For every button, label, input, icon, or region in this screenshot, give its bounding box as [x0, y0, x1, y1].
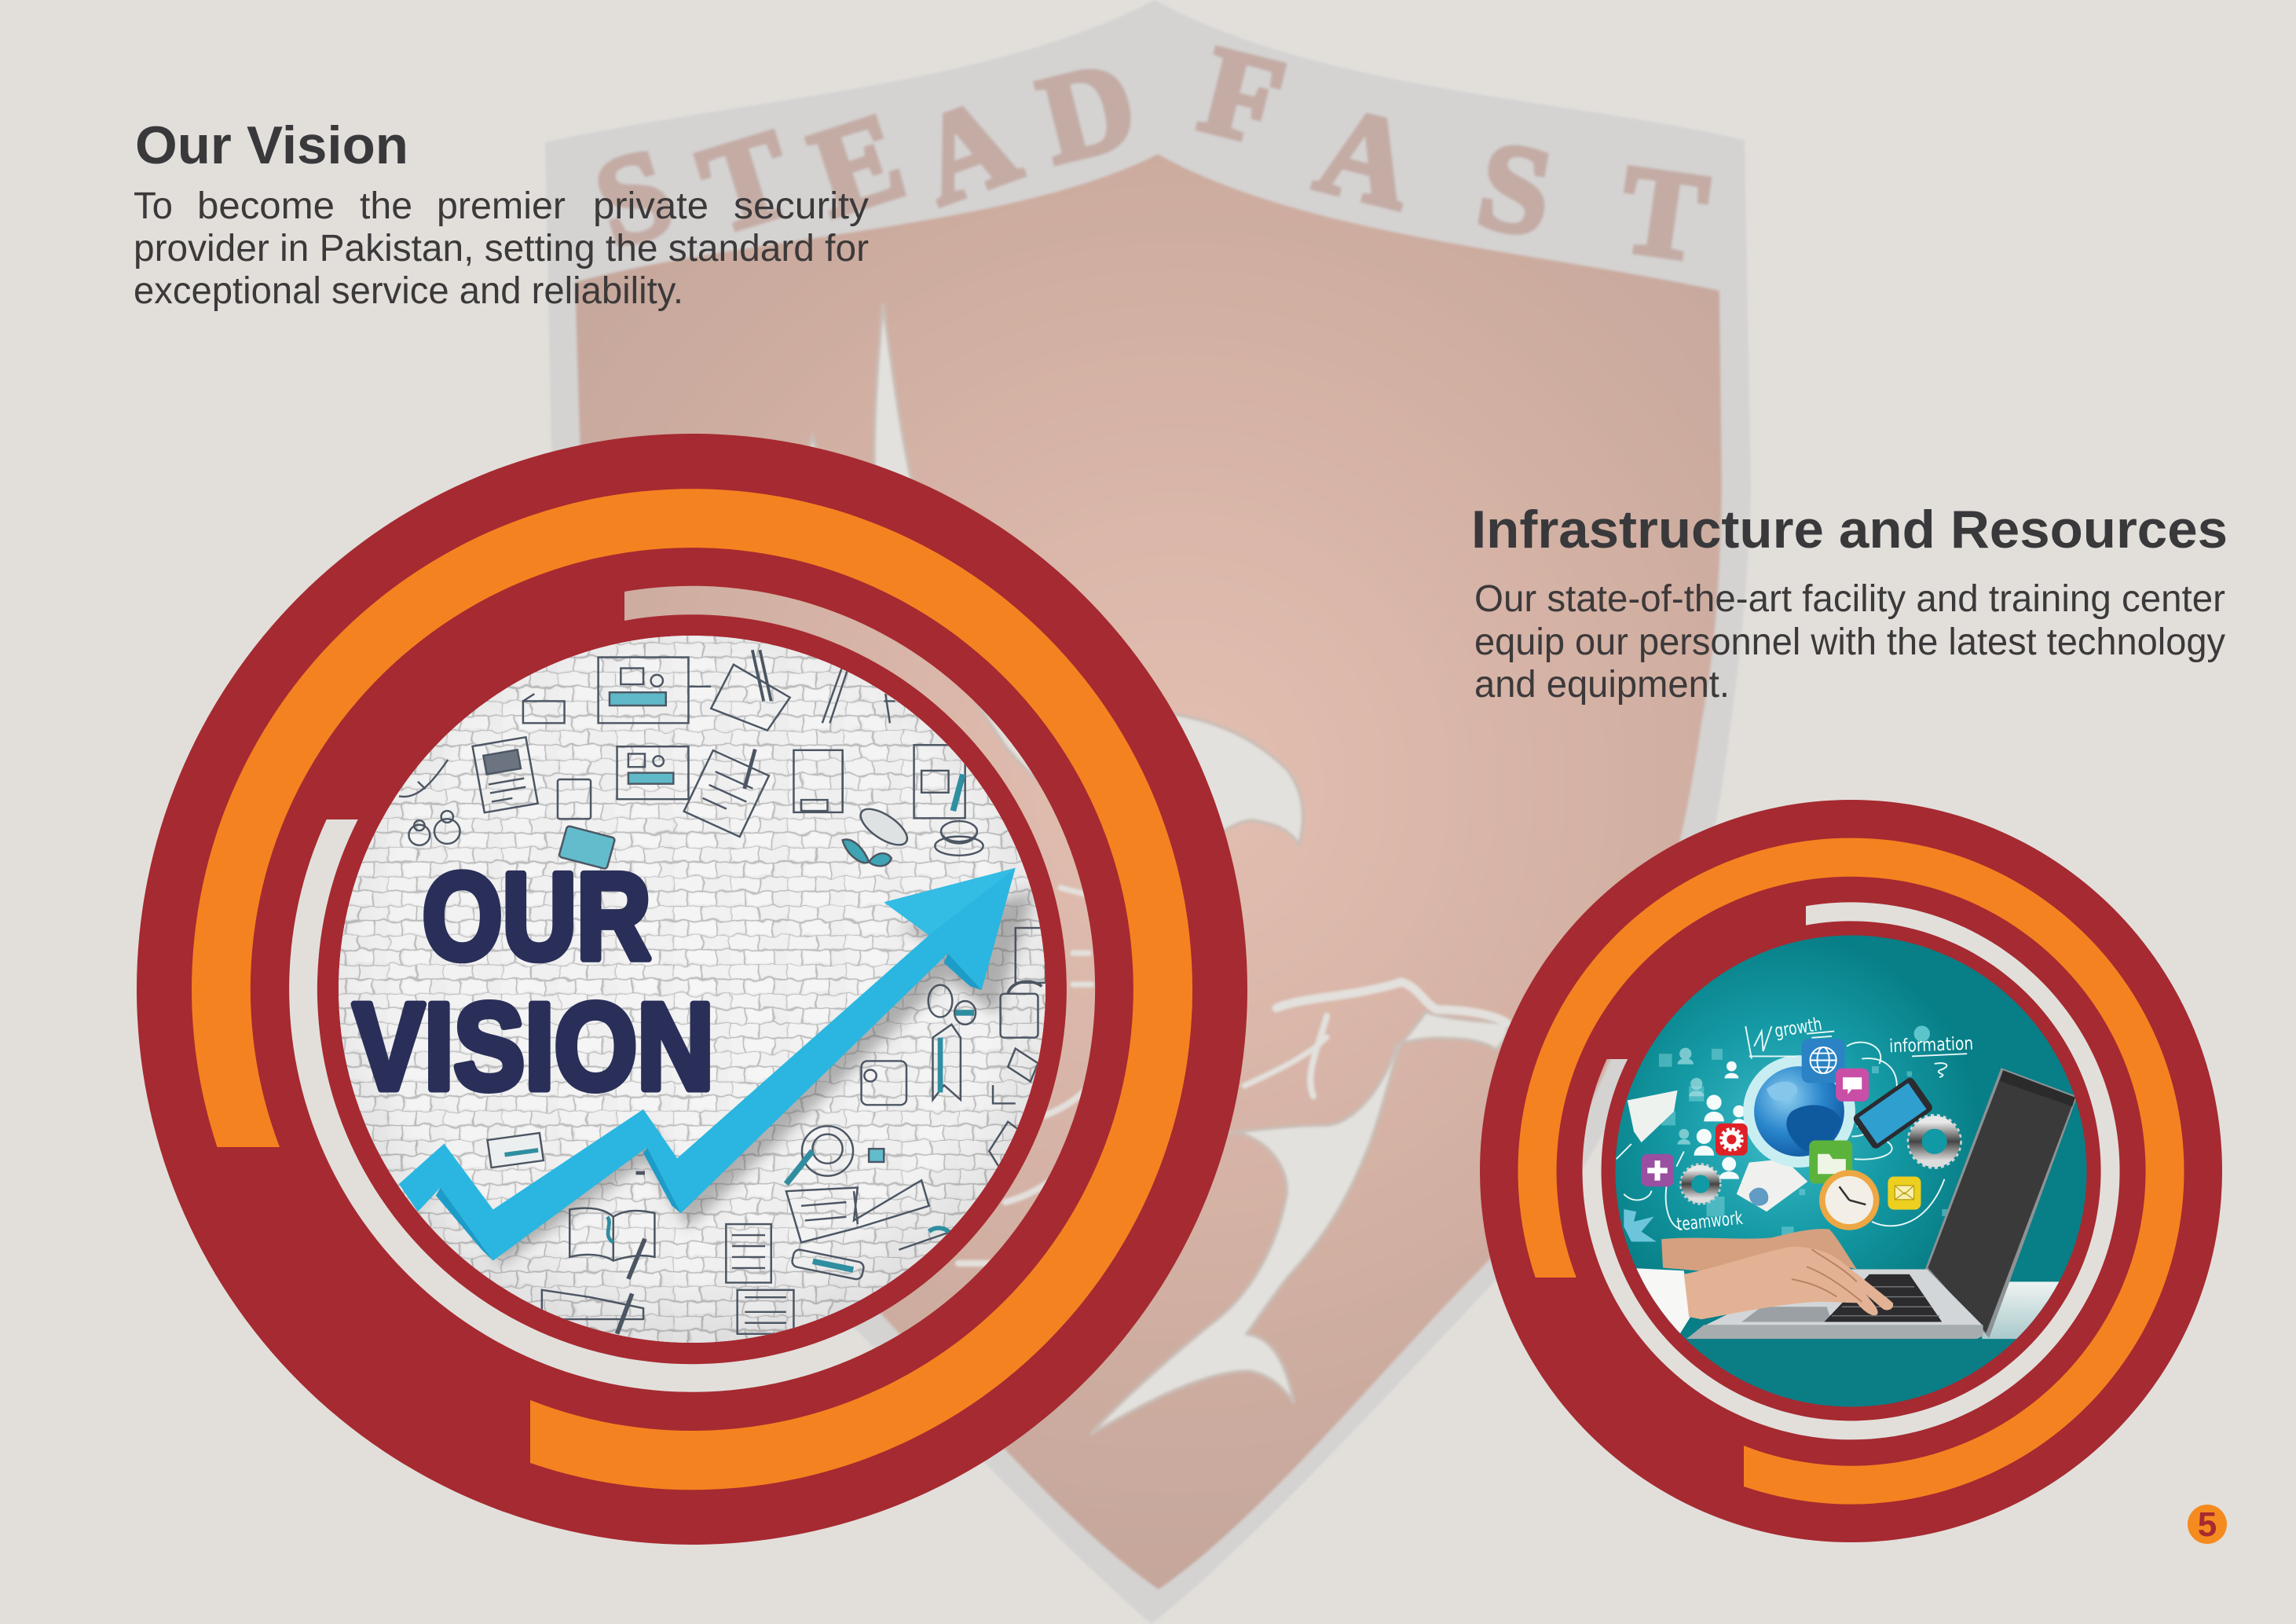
technology labels: information — [1889, 1034, 1974, 1057]
heading: our vision: Our Vision — [135, 115, 408, 175]
orange arc — [192, 489, 1192, 1490]
small spike — [807, 434, 833, 511]
eagle upper head — [1131, 707, 1303, 849]
shield banner lettering: T — [686, 102, 807, 261]
technology labels — [1675, 1014, 1974, 1235]
text block: our vision: private — [593, 185, 709, 227]
technology labels: growth — [1773, 1014, 1823, 1042]
text block: infrastructure and resources: equip our personnel with the latest technology — [1474, 621, 2225, 663]
icon: mail tile — [1888, 1176, 1921, 1210]
red disc with open ring — [137, 434, 1247, 1545]
wall lettering: OUR VISION: VISION — [353, 977, 714, 1115]
desk — [1982, 1281, 2067, 1340]
photo: our vision brick wall — [339, 636, 1045, 1343]
floating paper sheets — [1628, 1091, 1678, 1142]
text block: our vision: premier — [437, 185, 566, 227]
finger creases — [1792, 1249, 1862, 1302]
icon: plus tile — [1642, 1154, 1674, 1186]
icon: chat tile — [1836, 1069, 1869, 1102]
far hand — [1661, 1229, 1857, 1272]
arrow body — [399, 868, 1016, 1261]
laptop — [1686, 1068, 2077, 1339]
shield banner lettering: D — [1027, 33, 1148, 190]
icon: blue arrows — [1624, 1209, 1657, 1241]
orange arc — [1518, 838, 2184, 1505]
text block: infrastructure and resources: Our state-of-the-art facility and training center — [1474, 578, 2225, 620]
shield banner lettering: S — [580, 120, 688, 274]
shield banner lettering: A — [1305, 79, 1427, 236]
faded squares — [1659, 1049, 1949, 1239]
icon: clock — [1819, 1170, 1880, 1230]
icon: settings tile — [1716, 1124, 1748, 1156]
wall lettering: OUR VISION: OUR — [423, 847, 651, 985]
watermark: steadfast shield — [545, 0, 1751, 1624]
keyboard — [1824, 1274, 1942, 1322]
icon: folder tile — [1809, 1141, 1852, 1183]
text block: infrastructure and resources: and equipment. — [1474, 664, 1730, 706]
laptop screen — [1925, 1068, 2077, 1338]
shield red field — [575, 154, 1722, 1589]
icon: globe tile — [1802, 1039, 1845, 1083]
white people icons — [1694, 1061, 1747, 1179]
eagle feather spike — [874, 305, 1131, 849]
text block: our vision: the — [360, 185, 412, 227]
text block: our vision: provider in Pakistan, setting the standard for — [134, 228, 869, 269]
near hand — [1684, 1247, 1893, 1319]
icon: large gear — [1910, 1116, 1960, 1167]
text block: our vision: To — [134, 185, 173, 227]
shield banner lettering: T — [1613, 137, 1715, 288]
laptop base — [1704, 1269, 1983, 1326]
globe with halo — [1743, 1055, 1855, 1168]
teal lower band — [1606, 1339, 2107, 1424]
wall lettering: OUR VISION — [350, 869, 710, 1094]
eagle emblem — [807, 305, 1508, 1434]
red disc with open ring — [1480, 800, 2222, 1542]
shield banner lettering: S — [1469, 114, 1562, 263]
technology labels: teamwork — [1675, 1208, 1744, 1235]
eagle lower body — [1091, 1012, 1508, 1434]
text block: our vision: security — [734, 185, 869, 227]
wall doodles — [399, 650, 1045, 1334]
panel: our vision circle — [137, 434, 1247, 1545]
shield banner lettering: E — [796, 85, 919, 244]
photo: laptop and technology icons — [1615, 935, 2086, 1406]
arrow shadow — [403, 891, 1034, 1264]
blue rising arrow — [399, 868, 1016, 1261]
white shirt sleeve — [1626, 1268, 1690, 1340]
icon: small gear — [1682, 1165, 1719, 1203]
text block: our vision: become — [197, 185, 335, 227]
hand-drawn chart and labels — [1617, 1026, 1967, 1229]
shield banner lettering: F — [1188, 19, 1297, 173]
heading: infrastructure and resources: Infrastructure and Resources — [1471, 500, 2228, 559]
page number badge: 5 — [2198, 1505, 2217, 1544]
shield banner lettering — [580, 19, 1715, 288]
panel: infrastructure circle — [1480, 800, 2222, 1542]
eagle thin strands — [958, 809, 1507, 1263]
shield banner lettering: A — [901, 69, 1034, 231]
teal glow background — [1606, 931, 2097, 1342]
shield outer border — [545, 0, 1751, 1624]
text block: our vision: exceptional service and reliability. — [134, 270, 683, 312]
typing hands — [1661, 1229, 1893, 1319]
page number badge — [2188, 1505, 2227, 1544]
icon: smartphone — [1851, 1076, 1934, 1150]
